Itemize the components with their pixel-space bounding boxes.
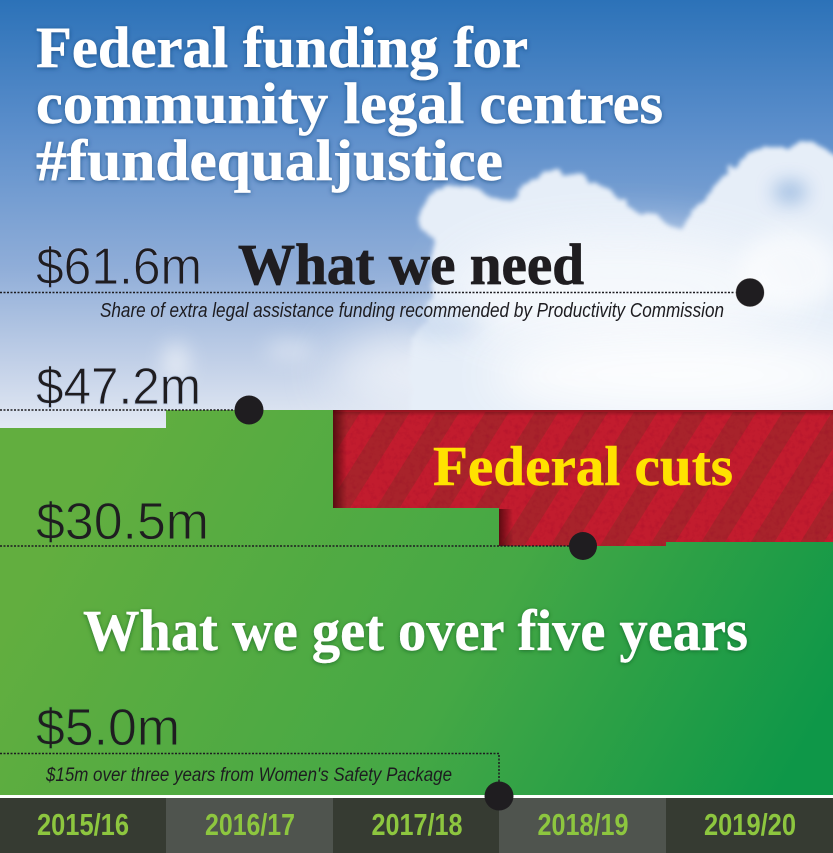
sky background: [0, 0, 833, 430]
data point: $30.5m: $30.5m: [36, 493, 209, 551]
data point: $5.0m: $15m over three years from Women's Safety Package: [45, 765, 452, 786]
title: community legal centres: [36, 71, 663, 136]
year bar: 2016/17: [205, 807, 295, 842]
title: Federal funding for: [36, 15, 528, 80]
year bar: 2018/19: [538, 807, 628, 842]
panel: federal cuts band: [333, 410, 833, 547]
clouds: [163, 143, 833, 420]
data point: $61.6m what we need: $61.6m: [36, 238, 202, 296]
data point: $5.0m: $5.0m: [36, 699, 180, 757]
title: [36, 15, 663, 193]
data point: $61.6m what we need: What we need: [238, 232, 584, 297]
data point: $61.6m what we need: Share of extra legal assistance funding recommended by Productivity Commission: [100, 300, 724, 322]
heading: what we get over five years: What we get over five years: [83, 598, 748, 663]
data point: $47.2m: $47.2m: [36, 358, 201, 416]
year bar: 2015/16: [37, 807, 129, 842]
data point: $61.6m what we need: [0, 232, 764, 322]
year bar: 2019/20: [704, 807, 796, 842]
year bar: [0, 795, 833, 853]
data point: $30.5m: [0, 493, 597, 560]
heading: federal cuts: Federal cuts: [433, 436, 733, 498]
data point: $47.2m: [0, 358, 264, 424]
panel: green funding area: [0, 410, 833, 796]
data point: $5.0m: [0, 699, 514, 810]
title: #fundequaljustice: [36, 128, 503, 193]
year bar: 2017/18: [372, 807, 462, 842]
